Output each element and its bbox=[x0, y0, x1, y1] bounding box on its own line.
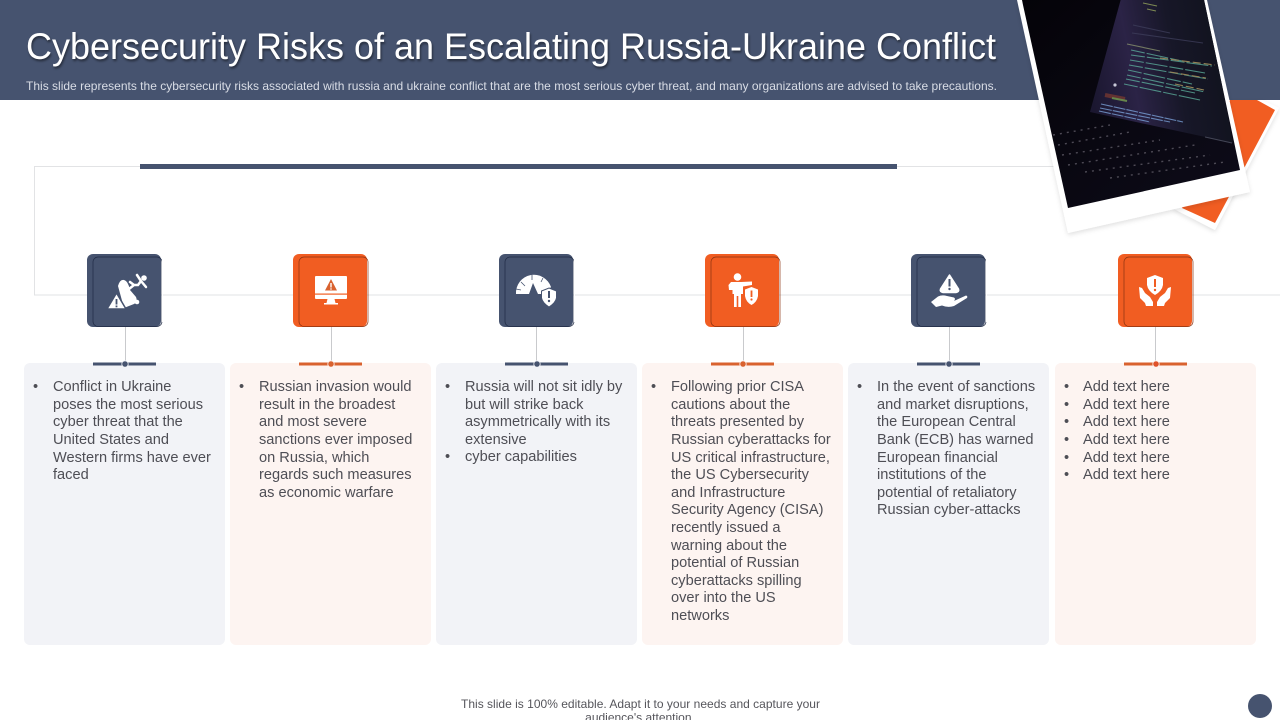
icon box 4 bbox=[705, 254, 780, 327]
text 1: United States and bbox=[53, 432, 169, 448]
text 4: the US Cybersecurity bbox=[671, 467, 810, 483]
text 6: • bbox=[1064, 467, 1069, 483]
text 1: poses the most serious bbox=[53, 397, 203, 413]
card 5 bbox=[848, 363, 1049, 645]
text 2: Russian invasion would bbox=[259, 379, 412, 395]
text 2: on Russia, which bbox=[259, 450, 369, 466]
text 2: result in the broadest bbox=[259, 397, 395, 413]
text 6: Add text here bbox=[1083, 467, 1170, 483]
subtitle: This slide represents the cybersecurity risks associated with russia and ukraine conflict that are the most serious cyber threat, and many organizations are advised to take precautions. bbox=[26, 79, 997, 93]
card 3 bbox=[436, 363, 637, 645]
connector 5 bbox=[917, 327, 980, 367]
text 2 bbox=[239, 379, 412, 501]
text 4: over into the US bbox=[671, 590, 776, 606]
icon box 2 bbox=[293, 254, 368, 327]
text 4: cautions about the bbox=[671, 397, 790, 413]
text 4: recently issued a bbox=[671, 520, 781, 536]
text 5: Bank (ECB) has warned bbox=[877, 432, 1034, 448]
text 6: Add text here bbox=[1083, 432, 1170, 448]
text 1: cyber threat that the bbox=[53, 414, 183, 430]
text 6: • bbox=[1064, 379, 1069, 395]
text 3: but will strike back bbox=[465, 397, 584, 413]
text 3: • bbox=[445, 449, 450, 465]
text 4: Following prior CISA bbox=[671, 379, 804, 395]
text 1: Conflict in Ukraine bbox=[53, 379, 171, 395]
text 3 bbox=[445, 379, 623, 465]
text 4: networks bbox=[671, 608, 729, 624]
title: Cybersecurity Risks of an Escalating Russia-Ukraine Conflict bbox=[26, 26, 997, 67]
icon: hands protecting shield bbox=[1139, 275, 1171, 306]
text 4: potential of Russian bbox=[671, 555, 799, 571]
text 3: extensive bbox=[465, 432, 527, 448]
page marker circle bbox=[1248, 694, 1272, 718]
text 2: • bbox=[239, 379, 244, 395]
orange diamond behind photo bbox=[1174, 100, 1279, 230]
card 2 bbox=[230, 363, 431, 645]
text 4: • bbox=[651, 379, 656, 395]
photo: laptop with code bbox=[1015, 0, 1250, 233]
icon: falling person and warning bbox=[107, 275, 147, 309]
connector 6 bbox=[1124, 327, 1187, 367]
text 3: cyber capabilities bbox=[465, 449, 577, 465]
text 6: • bbox=[1064, 432, 1069, 448]
icon: monitor with warning bbox=[315, 276, 347, 304]
text 5: institutions of the bbox=[877, 467, 987, 483]
footer note: This slide is 100% editable. Adapt it to your needs and capture your bbox=[461, 697, 820, 711]
text 4 bbox=[651, 379, 831, 624]
text 6: Add text here bbox=[1083, 450, 1170, 466]
text 4: and Infrastructure bbox=[671, 485, 785, 501]
card 4 bbox=[642, 363, 843, 645]
text 5: and market disruptions, bbox=[877, 397, 1029, 413]
text 5: European financial bbox=[877, 450, 998, 466]
text 6: • bbox=[1064, 450, 1069, 466]
text 3: • bbox=[445, 379, 450, 395]
text 5: Russian cyber-attacks bbox=[877, 502, 1021, 518]
text 3: Russia will not sit idly by bbox=[465, 379, 623, 395]
timeline connector line bbox=[34, 166, 1280, 295]
connector 3 bbox=[505, 327, 568, 367]
text 1: faced bbox=[53, 467, 89, 483]
text 1 bbox=[33, 379, 211, 483]
column 6 bbox=[1055, 254, 1256, 645]
text 6: Add text here bbox=[1083, 397, 1170, 413]
text 4: Security Agency (CISA) bbox=[671, 502, 823, 518]
text 5: In the event of sanctions bbox=[877, 379, 1035, 395]
text 2: sanctions ever imposed bbox=[259, 432, 412, 448]
header band bbox=[0, 0, 1280, 100]
column 3 bbox=[436, 254, 637, 645]
text 5: the European Central bbox=[877, 414, 1016, 430]
text 6: Add text here bbox=[1083, 414, 1170, 430]
text 4: US critical infrastructure, bbox=[671, 450, 830, 466]
text 2: regards such measures bbox=[259, 467, 412, 483]
text 5 bbox=[857, 379, 1035, 518]
column 1 bbox=[24, 254, 225, 645]
text 6: Add text here bbox=[1083, 379, 1170, 395]
icon: hand holding warning bbox=[931, 275, 967, 307]
text 5: potential of retaliatory bbox=[877, 485, 1017, 501]
card 1 bbox=[24, 363, 225, 645]
text 4: cyberattacks spilling bbox=[671, 573, 802, 589]
text 6: • bbox=[1064, 414, 1069, 430]
connector 1 bbox=[93, 327, 156, 367]
icon box 6 bbox=[1118, 254, 1193, 327]
text 4: warning about the bbox=[670, 538, 787, 554]
icon box 3 bbox=[499, 254, 574, 327]
text 2: as economic warfare bbox=[259, 485, 394, 501]
text 2: and most severe bbox=[259, 414, 367, 430]
icon box 5 bbox=[911, 254, 986, 327]
text 6 bbox=[1064, 379, 1170, 483]
card 6 bbox=[1055, 363, 1256, 645]
footer note bbox=[461, 697, 820, 720]
icon: gauge with shield bbox=[516, 275, 556, 307]
text 6: • bbox=[1064, 397, 1069, 413]
icon: person with shield bbox=[728, 273, 758, 307]
text 5: • bbox=[857, 379, 862, 395]
column 4 bbox=[642, 254, 843, 645]
text 4: Russian cyberattacks for bbox=[671, 432, 831, 448]
text 1: Western firms have ever bbox=[53, 450, 211, 466]
text 3: asymmetrically with its bbox=[465, 414, 610, 430]
timeline heavy bar bbox=[140, 164, 897, 169]
text 4: threats presented by bbox=[671, 414, 805, 430]
column 5 bbox=[848, 254, 1049, 645]
connector 4 bbox=[711, 327, 774, 367]
text 1: • bbox=[33, 379, 38, 395]
icon box 1 bbox=[87, 254, 162, 327]
column 2 bbox=[230, 254, 431, 645]
connector 2 bbox=[299, 327, 362, 367]
